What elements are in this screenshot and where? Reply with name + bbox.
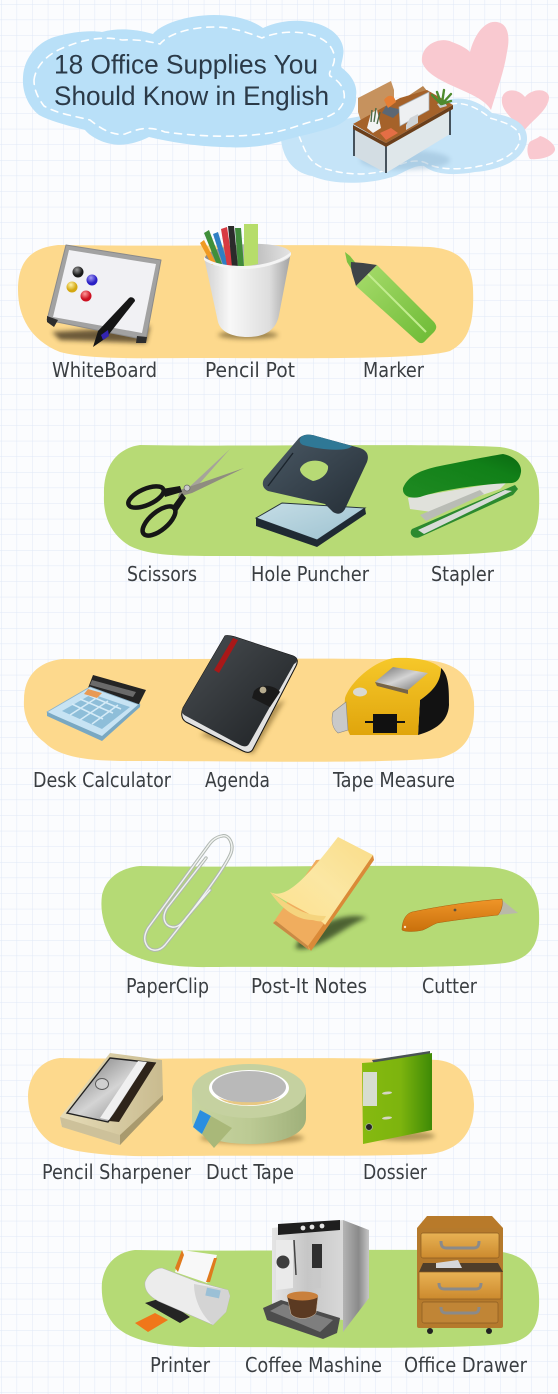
icon: scissors: [125, 449, 244, 541]
label: Printer: [150, 1353, 211, 1377]
label: [33, 768, 455, 792]
title text: [54, 50, 329, 111]
band: [101, 866, 539, 967]
label: Stapler: [431, 562, 495, 586]
label: Agenda: [205, 768, 270, 792]
icon: office desk: [353, 81, 453, 173]
title text: 18 Office Supplies You: [54, 50, 318, 80]
lower cloud stitching: [299, 104, 520, 174]
panel: row 2: [104, 435, 539, 586]
panel: row 6: [102, 1216, 539, 1377]
title text: Should Know in English: [54, 81, 329, 111]
icon: post-it notes: [270, 837, 374, 951]
icon: duct tape: [192, 1064, 306, 1148]
upper cloud stitching: [34, 27, 344, 136]
label: Hole Puncher: [251, 562, 370, 586]
icon: paperclip: [145, 836, 232, 950]
label: Post-It Notes: [251, 974, 367, 998]
label: Duct Tape: [206, 1160, 294, 1184]
band: [28, 1058, 474, 1156]
label: Office Drawer: [404, 1353, 528, 1377]
band: [102, 1250, 539, 1348]
panel: row 5: [28, 1051, 474, 1184]
hearts: [422, 22, 555, 159]
label: Dossier: [363, 1160, 428, 1184]
icon: tape measure: [332, 658, 449, 735]
panel: row 3: [24, 636, 474, 792]
icon: printer: [135, 1250, 230, 1332]
icon: agenda: [182, 636, 297, 754]
panel: row 4: [101, 836, 539, 998]
band: [24, 659, 474, 762]
label: Pencil Sharpener: [42, 1160, 192, 1184]
label: [42, 1160, 428, 1184]
label: [127, 562, 495, 586]
label: Scissors: [127, 562, 197, 586]
label: Cutter: [422, 974, 478, 998]
label: Pencil Pot: [205, 358, 295, 382]
label: Coffee Mashine: [245, 1353, 382, 1377]
label: [52, 358, 425, 382]
upper cloud: [23, 15, 356, 147]
icon: pencil sharpener: [60, 1053, 163, 1145]
label: PaperClip: [126, 974, 209, 998]
panel: row 1: [18, 224, 473, 382]
label: Desk Calculator: [33, 768, 172, 792]
label: [126, 974, 478, 998]
label: WhiteBoard: [52, 358, 157, 382]
icon: hole puncher: [256, 435, 368, 547]
icon: dossier: [362, 1051, 435, 1144]
icon: office drawer: [417, 1216, 503, 1334]
icon: marker: [345, 252, 436, 343]
band: [18, 245, 473, 358]
label: Marker: [363, 358, 425, 382]
icon: stapler: [403, 454, 521, 538]
icon: desk calculator: [47, 675, 146, 741]
icon: cutter: [402, 899, 518, 932]
label: Tape Measure: [332, 768, 455, 792]
label: [150, 1353, 528, 1377]
icon: pencil pot: [200, 224, 292, 339]
title banner: [23, 15, 555, 183]
icon: whiteboard: [47, 245, 161, 347]
icon: coffee machine: [263, 1220, 369, 1339]
lower cloud: [281, 99, 527, 183]
band: [104, 445, 539, 556]
